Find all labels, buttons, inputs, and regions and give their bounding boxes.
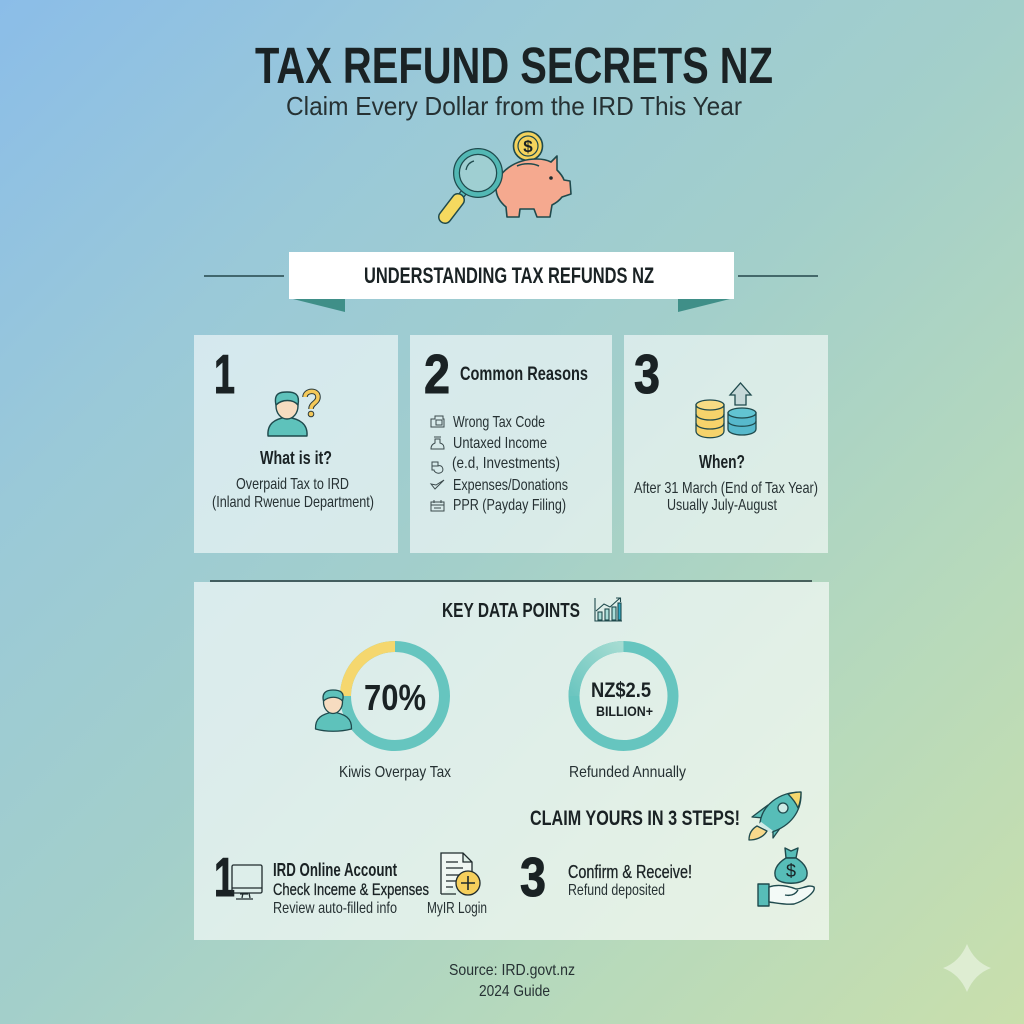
step 3: 3: [520, 846, 546, 908]
panel: what is it: (Inland Rwenue Department): [212, 494, 374, 511]
panel: common reasons: Wrong Tax Code: [453, 414, 545, 431]
icon: coin stacks with arrow: [696, 383, 756, 438]
step 1: Check Inceme & Expenses: [273, 880, 429, 899]
step 3: Confirm & Receive!: [568, 862, 692, 882]
icon: sparkle: [943, 944, 991, 992]
panel: common reasons: PPR (Payday Filing): [453, 497, 566, 514]
icon: rising bar chart: [595, 598, 622, 621]
value: NZ$2.5 billion: BILLION+: [596, 703, 653, 719]
icon: document with plus: [441, 853, 480, 895]
icon: hand holding money bag: [758, 848, 814, 906]
heading: key data points: KEY DATA POINTS: [442, 600, 580, 622]
panel: common reasons: (e.d, Investments): [452, 455, 560, 472]
icon: person: [315, 690, 352, 731]
panel: common reasons: [410, 335, 612, 553]
banner: understanding tax refunds: UNDERSTANDING TAX REFUNDS NZ: [364, 263, 654, 288]
panel: when: When?: [699, 452, 745, 472]
icon: piggy bank with magnifier and coin: [445, 132, 571, 217]
panel: key data points and steps: Kiwis Overpay Tax: [339, 764, 451, 781]
step 1: Review auto-filled info: [273, 900, 397, 917]
subtitle: Claim Every Dollar from the IRD This Year: [286, 91, 742, 121]
panel: common reasons: Expenses/Donations: [453, 477, 568, 494]
step 3: Refund deposited: [568, 882, 665, 899]
value: 70 percent: 70%: [364, 677, 426, 718]
icon: monitor: [232, 865, 262, 899]
source note: Source: IRD.govt.nz: [449, 962, 575, 979]
number 3: 3: [634, 343, 660, 405]
panel: key data points and steps: [194, 581, 829, 940]
panel: common reasons: Untaxed Income: [453, 435, 547, 452]
icon: piggy bank with magnifier and coin: $: [523, 137, 533, 156]
panel: what is it: Overpaid Tax to IRD: [236, 476, 349, 493]
source note: 2024 Guide: [479, 983, 550, 1000]
step 3: [520, 846, 814, 908]
step 1: [214, 846, 487, 917]
heading: claim yours in 3 steps: CLAIM YOURS IN 3 STEPS!: [530, 807, 740, 830]
step 1: 1: [214, 846, 235, 908]
list icons: [431, 416, 444, 511]
source note: [449, 962, 575, 1000]
heading: common reasons: Common Reasons: [460, 364, 588, 385]
panel: when: Usually July-August: [667, 497, 777, 514]
step 1: MyIR Login: [427, 900, 487, 917]
number 2: 2: [424, 343, 450, 405]
banner: understanding tax refunds: [204, 252, 818, 312]
icon: rocket: [749, 792, 801, 840]
chart: 70 percent donut: [346, 646, 444, 746]
panel: what is it: What is it?: [260, 448, 332, 468]
chart: refund donut: [574, 646, 673, 746]
panel: what is it: [194, 335, 398, 553]
value: NZ$2.5 billion: [591, 679, 653, 719]
icon: person with question mark: [268, 391, 318, 436]
value: NZ$2.5 billion: NZ$2.5: [591, 679, 651, 702]
icon: hand holding money bag: $: [786, 861, 796, 881]
panel: key data points and steps: Refunded Annually: [569, 764, 686, 781]
number 1: 1: [214, 343, 235, 405]
panel: when: [624, 335, 828, 553]
step 1: IRD Online Account: [273, 860, 397, 880]
title: TAX REFUND SECRETS NZ: [255, 37, 773, 94]
panel: when: After 31 March (End of Tax Year): [634, 480, 818, 497]
